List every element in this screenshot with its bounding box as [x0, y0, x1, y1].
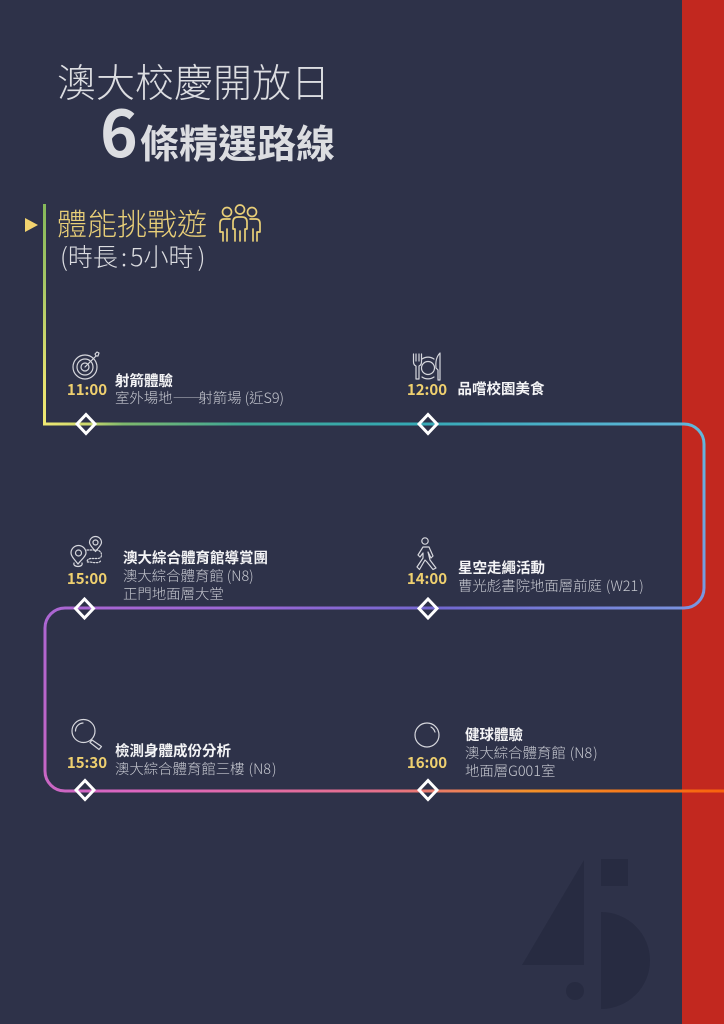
time: 14:00 — [407, 568, 447, 589]
time: 15:00 — [67, 568, 107, 589]
title line 2 — [100, 84, 335, 176]
stop 15:30 — [67, 720, 276, 800]
stop title: 射箭體驗 — [115, 370, 173, 391]
title line 1: 澳大校慶開放日 — [57, 53, 330, 109]
icon: map pins — [71, 536, 102, 566]
stop location: 澳大綜合體育館(N8) — [123, 565, 254, 586]
stop title: 澳大綜合體育館導賞團 — [123, 547, 268, 568]
title — [57, 53, 335, 176]
stop marker — [419, 414, 437, 434]
stop location: 曹光彪書院地面層前庭 (W21) — [458, 575, 644, 596]
red side band — [682, 0, 724, 1024]
time: 15:30 — [67, 752, 107, 773]
stop marker — [76, 780, 94, 800]
icon: plate and cutlery — [414, 353, 440, 380]
time: 11:00 — [67, 379, 107, 400]
route line — [43, 204, 724, 791]
stop marker — [419, 780, 437, 800]
stop title: 檢測身體成份分析 — [115, 740, 231, 761]
icon: magnifier — [72, 720, 102, 750]
route marker arrow — [25, 218, 38, 232]
time: 16:00 — [407, 752, 447, 773]
stop location: 正門地面層大堂 — [123, 583, 224, 604]
stop location: 地面層G001室 — [465, 760, 555, 781]
stop title: 健球體驗 — [465, 724, 523, 745]
stop 12:00 — [407, 353, 545, 434]
stop marker — [77, 414, 95, 434]
icon: walking person — [417, 538, 436, 570]
stop 15:00 — [67, 536, 268, 618]
route heading — [57, 200, 207, 274]
icon: group of people — [220, 205, 260, 241]
stop location: 室外場地——射箭場(近S9) — [115, 387, 284, 408]
stop location — [465, 742, 598, 781]
watermark: 45 logo — [522, 859, 650, 1009]
route name: 體能挑戰遊 — [57, 200, 207, 244]
stop marker — [76, 599, 94, 618]
icon: ball — [415, 723, 439, 747]
title line 2: 條精選路線 — [140, 114, 335, 170]
title line 2: 6 — [100, 84, 138, 176]
stop location: 澳大綜合體育館 (N8) — [465, 742, 598, 763]
stop 14:00 — [407, 538, 644, 618]
icon: target — [73, 352, 99, 379]
stop location — [123, 565, 254, 604]
stop title: 品嚐校園美食 — [458, 378, 545, 399]
stop marker — [419, 599, 437, 618]
stop 11:00 — [67, 352, 284, 434]
stop title: 星空走繩活動 — [458, 557, 545, 578]
duration: (時長:5小時) — [60, 238, 205, 274]
stop location: 澳大綜合體育館三樓 (N8) — [115, 758, 276, 779]
stop 16:00 — [407, 723, 598, 800]
time: 12:00 — [407, 379, 447, 400]
